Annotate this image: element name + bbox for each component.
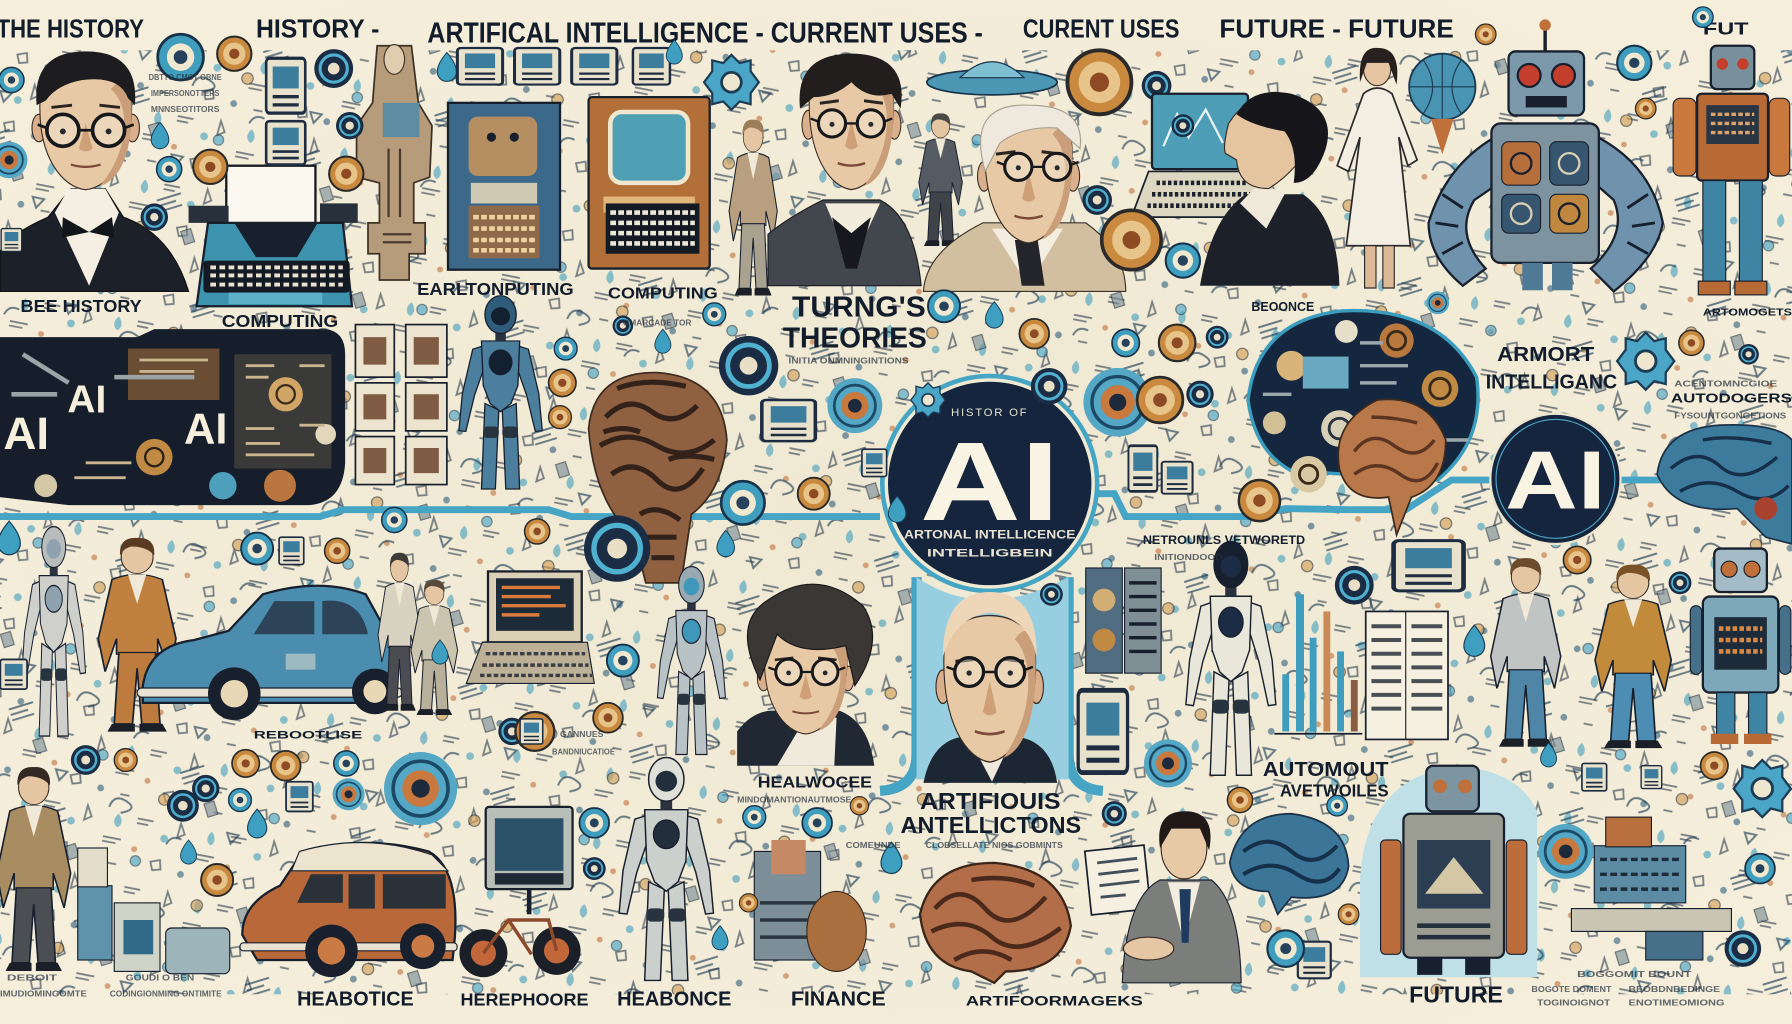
heading row: top labels: CURENT USES (1023, 14, 1179, 44)
document: note card (1085, 845, 1151, 915)
section labels: upper row: INTELLIGANC (1486, 371, 1617, 394)
illustration: blue brain (1657, 425, 1792, 544)
small captions: CLOBSELLATE NIOS GOBMINTS (926, 841, 1064, 850)
small captions: MINDOMANTIONAUTMOSE (737, 795, 852, 804)
figure: dark framed robot (619, 758, 713, 980)
illustration: blue vintage car (137, 586, 402, 720)
central badge: history of AI: INTELLIGBEIN (927, 548, 1053, 560)
illustration: blue brain lower (1230, 814, 1349, 914)
section labels: upper row: THEORIES (783, 322, 927, 354)
panel: server cabinets (1086, 568, 1161, 673)
section labels: upper row (21, 279, 1792, 405)
small captions: GOUDI O BEN (126, 974, 195, 983)
central badge: history of AI: HISTOR OF (951, 407, 1028, 419)
central badge: history of AI: ARTONAL INTELLICENCE (904, 527, 1075, 541)
small captions: TOGINOIGNOT (1537, 999, 1610, 1008)
photo cards (355, 325, 447, 485)
panel: bald man with glasses on blue backdrop (917, 577, 1069, 783)
illustration: brown brain (920, 863, 1071, 983)
section labels: middle and lower: REBOOTLISE (254, 729, 363, 741)
small captions: BEOBDNBEDINGE (1629, 985, 1721, 994)
figure: small man in dark suit (919, 113, 962, 246)
icon: orange medallion (1067, 50, 1171, 114)
heading row: top labels (0, 14, 1749, 49)
illustration: brown brain-head sculpture (589, 373, 727, 583)
small captions: MNNSEOTITORS (151, 105, 220, 114)
small captions: BOGGOMIT BOUNT (1577, 970, 1692, 979)
small captions: GANNUES (560, 730, 604, 739)
panel: dark AI collage: AI (184, 405, 227, 453)
icon: flying saucer (927, 62, 1057, 95)
small captions: COMEUNDE (846, 841, 901, 850)
figure: beige statue (357, 45, 432, 280)
portrait: man in profile in dark suit (1200, 92, 1339, 286)
figure: man in khaki suit (729, 120, 777, 295)
illustration: mixed machinery (754, 840, 866, 971)
section labels: upper row: COMPUTING (608, 285, 718, 302)
section labels: middle and lower: ARTIFOORMAGEKS (966, 994, 1143, 1009)
section labels: middle and lower: AUTOMOUT (1263, 758, 1389, 781)
figure: boy in yellow sweater (1595, 565, 1671, 748)
section labels: middle and lower: HEREPHOORE (461, 990, 589, 1010)
section labels: middle and lower (254, 533, 1503, 1011)
section labels: upper row: ARTOMOGETS (1703, 307, 1792, 318)
section labels: middle and lower: ANTELLICTONS (901, 812, 1081, 838)
portrait: young Turing with round glasses (768, 54, 921, 286)
panel: dark AI collage: AI (67, 379, 106, 422)
section labels: upper row: TURNG'S (792, 292, 926, 324)
panel: future robot on light blue circle (1360, 766, 1537, 977)
panel: blue computer cabinet (448, 103, 560, 270)
small captions: FYSOUNTGONGETIONS (1674, 411, 1787, 420)
small captions: BANDNIUCATIOE (552, 747, 615, 756)
small captions: BOGOTE DOMENT (1531, 985, 1612, 994)
section labels: middle and lower: HEALWOCEE (758, 774, 872, 791)
section labels: upper row: BEOONCE (1251, 300, 1314, 314)
icon: blue globe balloon (1409, 54, 1475, 154)
portrait: elderly man with white hair (923, 105, 1126, 291)
small captions: INITIA ONMNINGINTIONS (789, 356, 909, 365)
small captions: IMUDIOMINGOMTE (0, 990, 88, 999)
figure: blue robot (459, 296, 542, 489)
icon: typewriter (189, 166, 358, 306)
central badge: history of AI: AI (920, 419, 1059, 544)
figure: white android with blue chest (1186, 542, 1276, 775)
illustration: brain collage with medallions (1248, 311, 1478, 535)
figure: man in grey suit holding tablet (1122, 811, 1241, 983)
central badge: history of AI (882, 376, 1097, 591)
illustration: tower machines (78, 848, 230, 974)
figure: woman in white dress (1337, 48, 1417, 288)
figure: man in brown jacket (0, 767, 71, 971)
panel: dark AI collage: AI (3, 408, 49, 459)
illustration: orange vintage van (240, 843, 457, 977)
panel: dark AI collage (0, 329, 345, 505)
section labels: middle and lower: FUTURE (1409, 981, 1503, 1007)
section labels: middle and lower: HEABONCE (617, 988, 731, 1011)
panel: orange vintage computer terminal (589, 97, 710, 269)
figure: boy in grey sweater (1491, 558, 1561, 747)
heading row: top labels: THE HISTORY (0, 14, 144, 44)
section labels: middle and lower: ARTIFIOUIS (920, 788, 1061, 814)
section labels: upper row: COMPUTING (222, 311, 338, 331)
badge: AI circle: AI (1505, 436, 1606, 527)
figure: large gray-blue robot with red eyes (1429, 19, 1663, 291)
small captions: ACENTOMNCGIOE (1674, 379, 1778, 388)
portrait: man with round glasses and bow tie (0, 51, 189, 291)
portrait: man with wavy hair (737, 584, 874, 766)
connector: teal timeline (0, 480, 1792, 791)
figure: teal boxy robot (1690, 549, 1791, 744)
illustration: future machines (1571, 817, 1731, 960)
small captions: IMPERSONOTTERS (151, 89, 220, 98)
small captions: INITIONDOOD (1154, 553, 1223, 562)
icon: teal swirl and orange medallion (158, 34, 251, 80)
figure: small orange and blue robot (1673, 46, 1790, 295)
small captions: OMARCADE TOR (623, 319, 692, 328)
section labels: middle and lower: AVETWOILES (1280, 781, 1389, 801)
badge: AI circle (1490, 414, 1621, 544)
figure: small silver robot (657, 567, 725, 755)
heading row: top labels: ARTIFICAL INTELLIGENCE - CURRENT USES - (427, 17, 983, 49)
section labels: middle and lower: HEABOTICE (297, 988, 414, 1011)
figure: two men at a bench (378, 553, 458, 715)
heading row: top labels: FUTURE - FUTURE (1219, 14, 1454, 44)
small captions: ENOTIMEOMIONG (1629, 999, 1725, 1008)
small captions: DEBOIT (7, 974, 57, 983)
figure: white android (22, 527, 86, 736)
section labels: upper row: BEE HISTORY (21, 296, 142, 316)
heading row: top labels: FUT (1703, 18, 1749, 38)
section labels: upper row: ARMORT (1497, 343, 1595, 366)
section labels: middle and lower: NETROUNLS VETWORETD (1143, 533, 1305, 547)
small captions: DBTTO CMOT OBNE (149, 73, 222, 82)
illustration: tricycle (459, 920, 581, 977)
chart: teal bar chart (1274, 594, 1362, 734)
heading row: top labels: HISTORY - (256, 14, 379, 44)
document: open report (1366, 611, 1448, 739)
small captions: CODINGIONMING ONTIMITE (110, 990, 222, 999)
section labels: upper row: EARLTONPUTING (417, 279, 574, 299)
figure: woman in orange suit (98, 538, 176, 732)
illustration: monitor on post (486, 807, 573, 914)
icon: laptop on desk (1131, 94, 1269, 217)
illustration: retro computer terminal (466, 571, 594, 683)
section labels: middle and lower: FINANCE (791, 988, 886, 1011)
section labels: upper row: AUTODOGERS (1671, 391, 1792, 405)
